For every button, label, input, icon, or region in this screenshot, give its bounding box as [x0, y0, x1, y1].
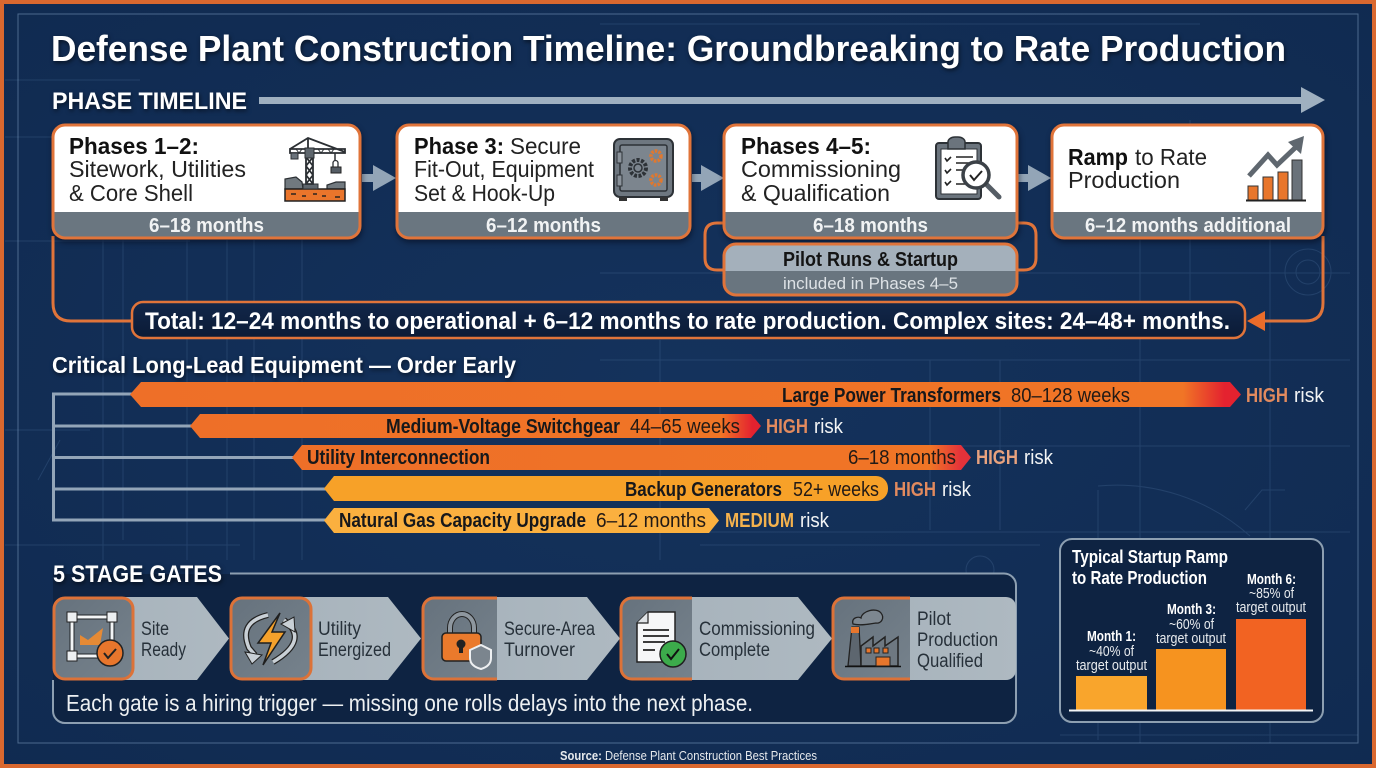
- total duration bar: Total: 12–24 months to operational + 6–12 months to rate production. Complex sites: 24–48+ months.: [145, 308, 1230, 335]
- bar: natural gas capacity upgrade: Natural Gas Capacity Upgrade: [339, 510, 586, 532]
- panel: phases 4-5: Commissioning: [741, 156, 901, 182]
- arrow: timeline direction: [259, 87, 1325, 113]
- bar: natural gas capacity upgrade: 6–12 months: [596, 510, 706, 532]
- heading: stage gates: 5 STAGE GATES: [53, 561, 222, 588]
- bar: backup generators: risk: [942, 479, 972, 501]
- panel: pilot runs: included in Phases 4–5: [783, 274, 958, 293]
- gate 3: secure-area turnover: Secure-Area: [504, 619, 595, 640]
- panel: phases 1-2: & Core Shell: [69, 180, 193, 206]
- panel: pilot runs: [724, 244, 1017, 295]
- gate 5: pilot production qualified: Qualified: [917, 651, 983, 672]
- gate 2: utility energized: [231, 597, 421, 680]
- gate 2: utility energized: Utility: [318, 619, 361, 640]
- icon: factory: [845, 610, 901, 666]
- gate 5: pilot production qualified: Pilot: [917, 609, 952, 630]
- panel: startup ramp chart: to Rate Production: [1072, 568, 1207, 588]
- icon: padlock and shield: [442, 614, 491, 669]
- bar: backup generators: Backup Generators: [625, 479, 782, 501]
- panel: phase 3: Set & Hook-Up: [414, 180, 555, 206]
- bar: medium-voltage switchgear: [190, 414, 844, 438]
- panel: ramp to rate: to Rate: [1135, 144, 1207, 170]
- bar: utility interconnection: HIGH: [976, 447, 1018, 469]
- panel: ramp to rate: 6–12 months additional: [1085, 215, 1291, 237]
- bar: month 3: Month 3:: [1167, 601, 1216, 618]
- bar: large power transformers: 80–128 weeks: [1011, 385, 1130, 407]
- panel: ramp to rate: Production: [1068, 167, 1180, 193]
- gate 5: pilot production qualified: [833, 597, 1016, 680]
- bar: large power transformers: risk: [1294, 385, 1325, 407]
- bar: month 6: Month 6:: [1247, 571, 1296, 588]
- panel: phases 4-5: & Qualification: [741, 180, 890, 206]
- gate 4: commissioning complete: Commissioning: [699, 619, 815, 640]
- panel: phase 3: [397, 125, 690, 238]
- panel: phases 4-5: 6–18 months: [813, 215, 928, 237]
- panel: phases 4-5: Phases 4–5:: [741, 133, 871, 159]
- bar: utility interconnection: [292, 445, 1054, 470]
- gate 4: commissioning complete: Complete: [699, 640, 770, 661]
- bar: natural gas capacity upgrade: risk: [800, 510, 830, 532]
- panel: stage gates: Each gate is a hiring trigger — missing one rolls delays into the next phase.: [66, 690, 753, 716]
- bar: utility interconnection: risk: [1024, 447, 1054, 469]
- panel: stage gates: [53, 574, 1016, 723]
- panel: phases 4-5: [724, 125, 1017, 238]
- heading: long-lead equipment: Critical Long-Lead Equipment — Order Early: [52, 352, 516, 378]
- icon: site check: [67, 612, 123, 666]
- gate 2: utility energized: Energized: [318, 640, 391, 661]
- panel: phase 3: Phase 3:: [414, 133, 504, 159]
- gate 3: secure-area turnover: Turnover: [504, 640, 576, 661]
- gate 4: commissioning complete: [621, 597, 832, 680]
- panel: phases 1-2: Sitework, Utilities: [69, 156, 246, 182]
- panel: phase 3: Fit-Out, Equipment: [414, 156, 595, 182]
- gate 3: secure-area turnover: [423, 597, 620, 680]
- bar: month 1: [1076, 628, 1148, 710]
- gate 5: pilot production qualified: Production: [917, 630, 998, 651]
- gate 1: site ready: Ready: [141, 640, 186, 661]
- bar: natural gas capacity upgrade: [324, 508, 830, 533]
- bar: medium-voltage switchgear: risk: [814, 416, 844, 438]
- bar: month 3: ~60% of: [1169, 616, 1215, 633]
- panel: ramp to rate: Ramp: [1068, 144, 1128, 170]
- connector: equipment tree: [53, 394, 326, 520]
- icon: clipboard and magnifier: [936, 137, 999, 199]
- arrow: into total bar: [1247, 311, 1265, 331]
- bar: medium-voltage switchgear: Medium-Voltage Switchgear: [386, 416, 620, 438]
- panel: startup ramp chart: [1060, 539, 1323, 722]
- bar: natural gas capacity upgrade: MEDIUM: [725, 510, 794, 532]
- panel: ramp to rate: [1052, 125, 1323, 238]
- gate 1: site ready: Site: [141, 619, 169, 640]
- bar: month 6: target output: [1236, 599, 1307, 616]
- bar: backup generators: HIGH: [894, 479, 936, 501]
- panel: phase 3: 6–12 months: [486, 215, 601, 237]
- panel: phases 1-2: 6–18 months: [149, 215, 264, 237]
- icon: lightning and cycle: [245, 613, 295, 665]
- panel: startup ramp chart: Typical Startup Ramp: [1072, 547, 1228, 567]
- bar: large power transformers: [130, 382, 1325, 407]
- panel: pilot runs: Pilot Runs & Startup: [783, 249, 958, 271]
- bar: month 6: ~85% of: [1249, 585, 1295, 602]
- gate 1: site ready: [54, 597, 229, 680]
- arrow: phase 3 to phase 4: [692, 165, 724, 191]
- title: Defense Plant Construction Timeline: Groundbreaking to Rate Production: [51, 28, 1286, 69]
- bar: utility interconnection: 6–18 months: [848, 447, 956, 469]
- arrow: phase 1 to phase 3: [362, 165, 396, 191]
- panel: phases 1-2: [53, 125, 360, 238]
- bar: month 3: [1156, 601, 1227, 710]
- bar: backup generators: 52+ weeks: [793, 479, 879, 501]
- icon: safe: [614, 139, 673, 201]
- bar: month 3: target output: [1156, 630, 1227, 647]
- arrow: phase 4 to ramp: [1018, 165, 1051, 191]
- panel: phase 3: Secure: [510, 133, 581, 159]
- bar: month 1: ~40% of: [1089, 643, 1135, 660]
- icon: crane: [285, 138, 345, 201]
- bar: utility interconnection: Utility Interconnection: [307, 447, 490, 469]
- heading: phase timeline: PHASE TIMELINE: [52, 88, 247, 115]
- bar: medium-voltage switchgear: HIGH: [766, 416, 808, 438]
- bar: month 1: Month 1:: [1087, 628, 1136, 645]
- panel: phases 1-2: Phases 1–2:: [69, 133, 199, 159]
- bar: large power transformers: Large Power Transformers: [782, 385, 1001, 407]
- icon: document with check: [637, 612, 686, 667]
- connector: pilot bracket: [705, 223, 1036, 270]
- bar: month 1: target output: [1076, 657, 1148, 674]
- icon: rising bar chart: [1246, 136, 1306, 200]
- source note: Source: Defense Plant Construction Best Practices: [560, 749, 817, 763]
- bar: backup generators: [324, 476, 972, 501]
- bar: large power transformers: HIGH: [1246, 385, 1288, 407]
- bar: medium-voltage switchgear: 44–65 weeks: [630, 416, 740, 438]
- bar: month 6: [1236, 571, 1307, 710]
- connector: total bracket: [53, 236, 1323, 321]
